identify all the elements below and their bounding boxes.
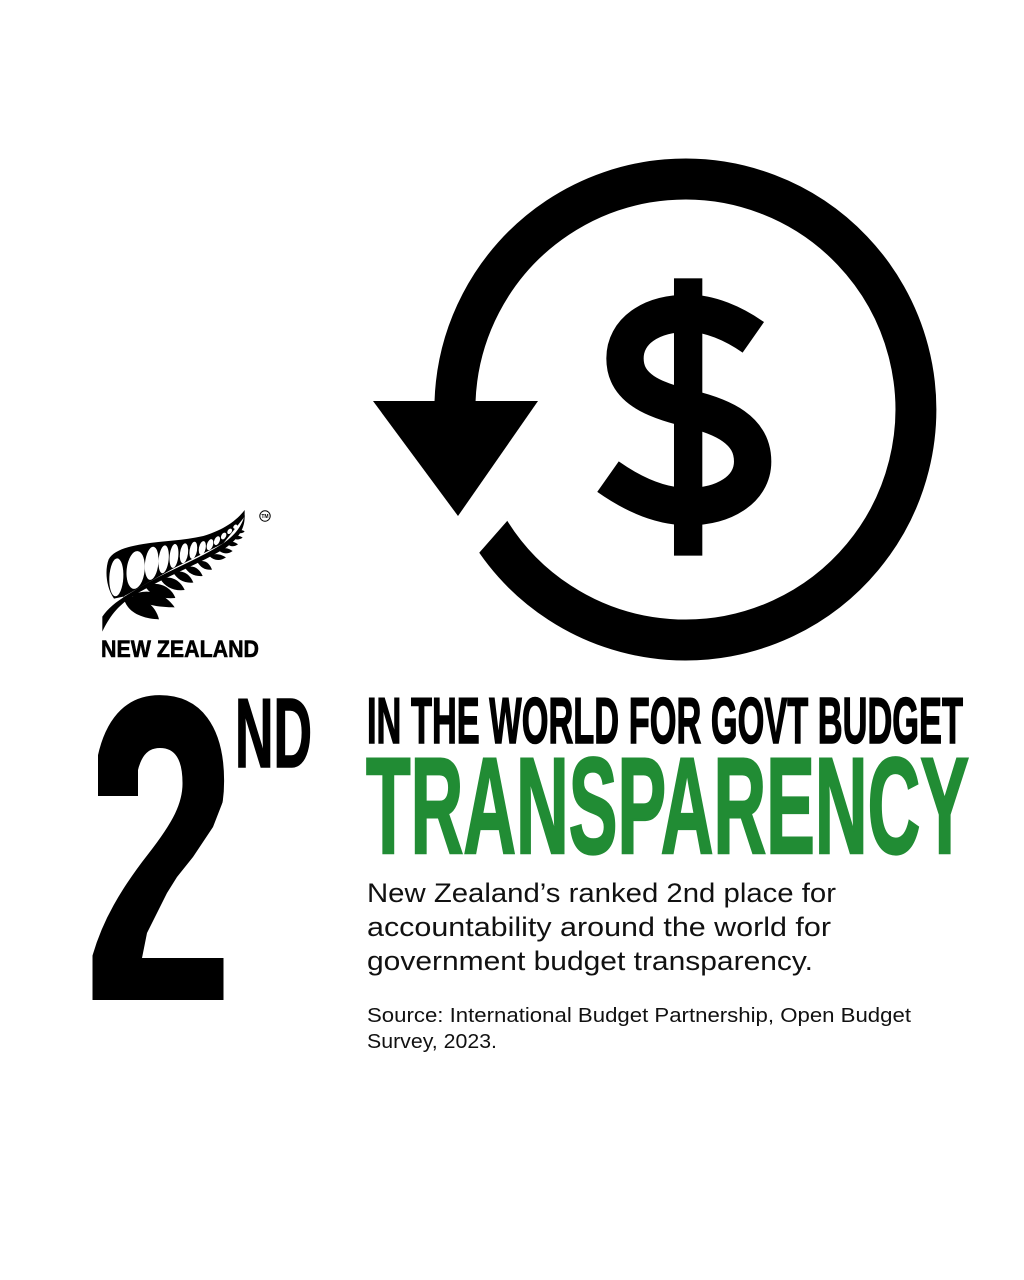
description text: accountability around the world for: [367, 912, 831, 942]
icon: trademark symbol: [260, 511, 270, 521]
source note: Survey, 2023.: [367, 1031, 497, 1053]
numeral 2: 2: [85, 610, 236, 1088]
description text: government budget transparency.: [367, 946, 813, 976]
big rank number: [84, 610, 312, 1088]
logo: New Zealand fern mark: [101, 510, 270, 663]
dollar sign icon: [608, 278, 753, 556]
description text: New Zealand’s ranked 2nd place for: [367, 878, 836, 908]
circular arrow ring: [455, 179, 916, 640]
source note: [367, 1005, 911, 1053]
ordinal suffix: ND: [235, 678, 312, 788]
icon: silver fern: [102, 510, 245, 632]
arrowhead: [373, 401, 538, 516]
logo wordmark: NEW ZEALAND: [101, 636, 259, 663]
description text: [367, 878, 836, 976]
source note: Source: International Budget Partnership, Open Budget: [367, 1005, 911, 1027]
heading: [366, 684, 969, 883]
icon: circular arrow around dollar sign: [373, 179, 916, 640]
icon: trademark symbol: TM: [261, 514, 269, 520]
